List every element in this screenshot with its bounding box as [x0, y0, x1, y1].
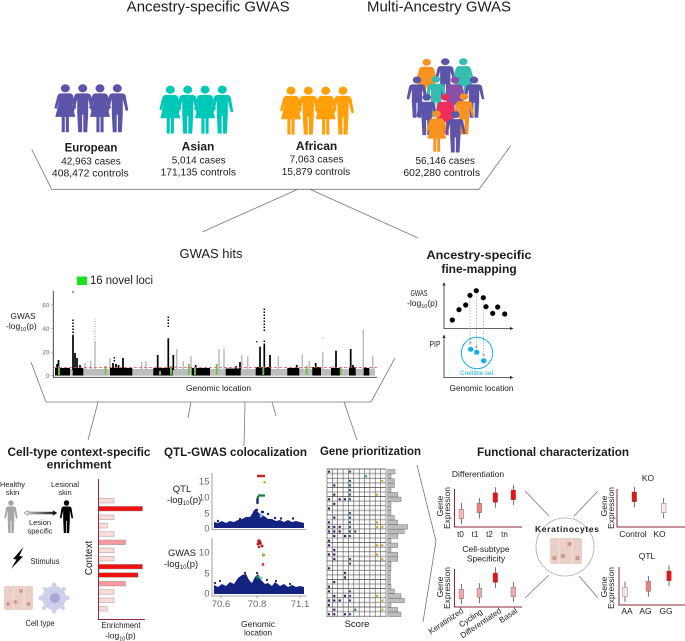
chart: gene score matrix: [327, 469, 408, 617]
axis label: Context: Context: [84, 541, 95, 575]
legend: novel loci: 16 novel loci: [90, 275, 153, 287]
text: African counts: 7,063 cases: [290, 155, 344, 166]
heading: Gene prioritization: Gene prioritization: [320, 444, 421, 458]
axis labels: timepoints: t0: [457, 530, 464, 539]
axis label: Manhattan y: (p): [26, 321, 37, 331]
axis labels: subtypes: Keratinized: [427, 606, 465, 636]
axis labels: genotypes: [621, 606, 673, 616]
text: Lesional skin: skin: [58, 488, 72, 497]
chart: GWAS locus plot: [199, 538, 309, 610]
axis labels: genotypes: AA: [621, 606, 633, 616]
text: Asian counts: 171,135 controls: [161, 168, 236, 179]
diagram: keratinocytes hub: [525, 491, 599, 598]
axis label: subtype y: Expression: [442, 567, 452, 609]
axis labels: timepoints: tn: [501, 530, 508, 539]
axis label: Enrichment: Enrichment: [102, 620, 141, 630]
chart: QTL locus plot: 10: [199, 492, 210, 504]
axis label: QTL y: [599, 567, 616, 609]
text: Lesion specific: Lesion: [29, 518, 51, 527]
chart: fine-mapping GWAS scatter: [442, 282, 514, 355]
heading: GWAS hits: GWAS hits: [179, 246, 243, 261]
axis label: differentiation y: Expression: [442, 487, 452, 529]
axis labels: KO groups: Control: [619, 529, 647, 539]
icon: black person: [60, 500, 73, 533]
arrow: healthy to lesional: [24, 510, 57, 516]
axis label: QTL: [167, 484, 201, 507]
axis label: subtype y: [435, 567, 452, 609]
axis label: Manhattan x: Genomic location: [186, 383, 251, 393]
axis labels: genotypes: AG: [639, 606, 652, 616]
text: African counts: [282, 139, 350, 178]
axis label: GWAS: [164, 548, 198, 571]
icon: lightning stimulus: [11, 547, 24, 569]
heading: QTL-GWAS colocalization: QTL-GWAS colocalization: [164, 445, 307, 459]
chart: GWAS locus plot: 71.1: [291, 599, 309, 610]
axis label: GWAS: 10: [180, 565, 187, 571]
axis label: Enrichment: [102, 620, 141, 641]
axis label: PIP: PIP: [430, 340, 440, 349]
heading: Cell-type context-specific enrichment: Cell-type context-specific: [8, 445, 151, 459]
chart: cell-subtype boxplots: [454, 567, 522, 607]
text: Healthy skin: [0, 480, 25, 497]
chart: QTL boxplots: [619, 565, 685, 605]
chart: differentiation boxplots: [454, 485, 522, 527]
axis label: QTL: -log: [167, 495, 183, 506]
heading: Cell-subtype Specificity: [462, 544, 510, 564]
text: multi-ancestry counts: 602,280 controls: [403, 168, 480, 179]
axis label: fine-mapping y: GWAS: [410, 288, 428, 298]
chart: GWAS locus plot: 0: [204, 588, 210, 600]
text: Lesion specific: [28, 518, 53, 536]
text: Asian counts: [161, 139, 236, 179]
icon: African people: [280, 87, 354, 135]
axis label: Enrichment: -log: [105, 630, 119, 640]
axis label: QTL: QTL: [173, 484, 191, 495]
chart: GWAS locus plot: 5: [204, 568, 210, 580]
axis label: QTL: 10: [183, 501, 190, 507]
chart: PIP credible set: [442, 334, 514, 379]
axis label: Manhattan y: 10: [20, 327, 26, 333]
axis label: GWAS: -log: [164, 559, 180, 570]
heading: Cell-type context-specific enrichment: [8, 445, 151, 472]
axis label: Genomic location: location: [244, 628, 272, 638]
axis labels: timepoints: t2: [486, 530, 493, 539]
chart: Manhattan plot: 20: [42, 350, 50, 356]
chart: GWAS locus plot: 70.8: [248, 599, 266, 610]
text: European counts: 408,472 controls: [52, 169, 129, 180]
bracket: GWAS hits to downstream analyses: [31, 358, 395, 446]
axis label: subtype y: Gene: [435, 576, 445, 597]
axis labels: timepoints: [457, 530, 508, 539]
text: Stimulus: Stimulus: [30, 557, 60, 566]
chart: GWAS locus plot: 70.6: [212, 599, 230, 610]
axis label: QTL: (p): [190, 495, 201, 506]
icon: European people: [54, 84, 128, 132]
chart: enrichment bars: [98, 479, 145, 620]
axis label: Manhattan y: GWAS: [10, 311, 36, 321]
text: multi-ancestry counts: 56,146 cases: [415, 156, 475, 167]
axis label: Score: Score: [345, 619, 369, 630]
chart: Manhattan plot: [42, 291, 377, 380]
axis label: GWAS: (p): [187, 559, 198, 570]
chart: QTL locus plot: 15: [199, 476, 210, 488]
icon: Asian people: [159, 86, 233, 134]
axis label: QTL y: Expression: [606, 567, 616, 609]
text: African counts: African: [296, 139, 337, 153]
axis labels: subtypes: Differentiated: [459, 606, 503, 640]
text: European counts: [52, 141, 129, 180]
heading: Ancestry-specific fine-mapping: fine-mapping: [441, 262, 517, 276]
text: African counts: 15,879 controls: [282, 167, 350, 178]
chart: Manhattan plot: 40: [42, 326, 50, 333]
axis label: KO y: Gene: [599, 495, 609, 516]
axis label: fine-mapping y: 10: [421, 304, 427, 310]
axis label: differentiation y: Gene: [435, 495, 445, 516]
axis label: Genomic location: [241, 619, 276, 638]
axis labels: genotypes: GG: [659, 606, 673, 616]
text: Asian counts: 5,014 cases: [172, 155, 226, 166]
text: Lesion specific: specific: [28, 526, 53, 536]
text: Lesional skin: [51, 480, 79, 497]
heading: KO: KO: [642, 473, 655, 483]
bracket: cohorts to analyses: [32, 146, 511, 238]
chart: PIP credible set: Credible set: [460, 371, 494, 377]
heading: Ancestry-specific fine-mapping: Ancestry-specific: [426, 248, 532, 262]
arrow: prioritization to functional characterization: [417, 465, 436, 622]
chart: QTL locus plot: 5: [204, 508, 210, 520]
text: multi-ancestry counts: [403, 156, 480, 179]
axis label: fine-mapping y: -log: [407, 298, 421, 308]
axis labels: subtypes: Cycling: [457, 607, 484, 629]
axis label: KO y: Expression: [606, 487, 616, 529]
chart: QTL locus plot: [199, 473, 306, 534]
heading: Cell-type context-specific enrichment: enrichment: [47, 458, 111, 472]
axis label: Enrichment: (p): [125, 630, 136, 640]
axis labels: timepoints: t1: [472, 530, 479, 539]
axis label: QTL y: Gene: [599, 576, 609, 597]
axis label: fine-mapping y: (p): [427, 298, 438, 308]
chart: GWAS locus plot: 10: [199, 548, 210, 558]
text: Cell type: Cell type: [26, 619, 55, 628]
axis labels: KO groups: KO: [653, 529, 666, 539]
axis label: fine-mapping x: Genomic location: [450, 383, 514, 393]
heading: Functional characterization: Functional characterization: [477, 445, 629, 459]
axis label: Manhattan y: [6, 311, 37, 333]
chart: QTL locus plot: 0: [204, 524, 210, 534]
heading: Cell-subtype Specificity: Cell-subtype: [462, 544, 510, 554]
heading: Differentiation: Differentiation: [452, 469, 504, 479]
axis labels: subtypes: [427, 606, 519, 640]
axis label: Manhattan y: -log: [6, 321, 20, 331]
axis label: Genomic location: Genomic: [241, 619, 276, 629]
axis label: GWAS: GWAS: [168, 548, 196, 559]
axis label: KO y: [599, 487, 616, 529]
heading: Ancestry-specific fine-mapping: [426, 248, 532, 276]
axis labels: KO groups: [619, 529, 666, 539]
text: Healthy skin: Healthy: [0, 480, 25, 489]
axis labels: subtypes: Basal: [497, 606, 519, 625]
chart: Manhattan plot: 60: [42, 302, 50, 310]
heading: QTL: QTL: [639, 551, 656, 561]
heading: Cell-subtype Specificity: Specificity: [467, 554, 506, 564]
text: Lesional skin: Lesional: [51, 480, 79, 489]
icon: grey person: [4, 500, 18, 533]
icon: keratinocyte cells: [4, 586, 33, 610]
text: Asian counts: Asian: [182, 139, 214, 153]
text: European counts: European: [65, 141, 117, 155]
icon: multi-ancestry crowd: [407, 58, 484, 152]
icon: immune cell: [38, 582, 70, 614]
diagram: keratinocytes hub: Keratinocytes: [535, 524, 599, 534]
text: European counts: 42,963 cases: [61, 156, 121, 167]
chart: Manhattan plot: 0: [46, 373, 50, 380]
axis label: fine-mapping y: [407, 288, 438, 310]
text: Healthy skin: skin: [6, 488, 19, 497]
chart: KO boxplots: [617, 487, 685, 527]
axis label: differentiation y: [435, 487, 452, 529]
